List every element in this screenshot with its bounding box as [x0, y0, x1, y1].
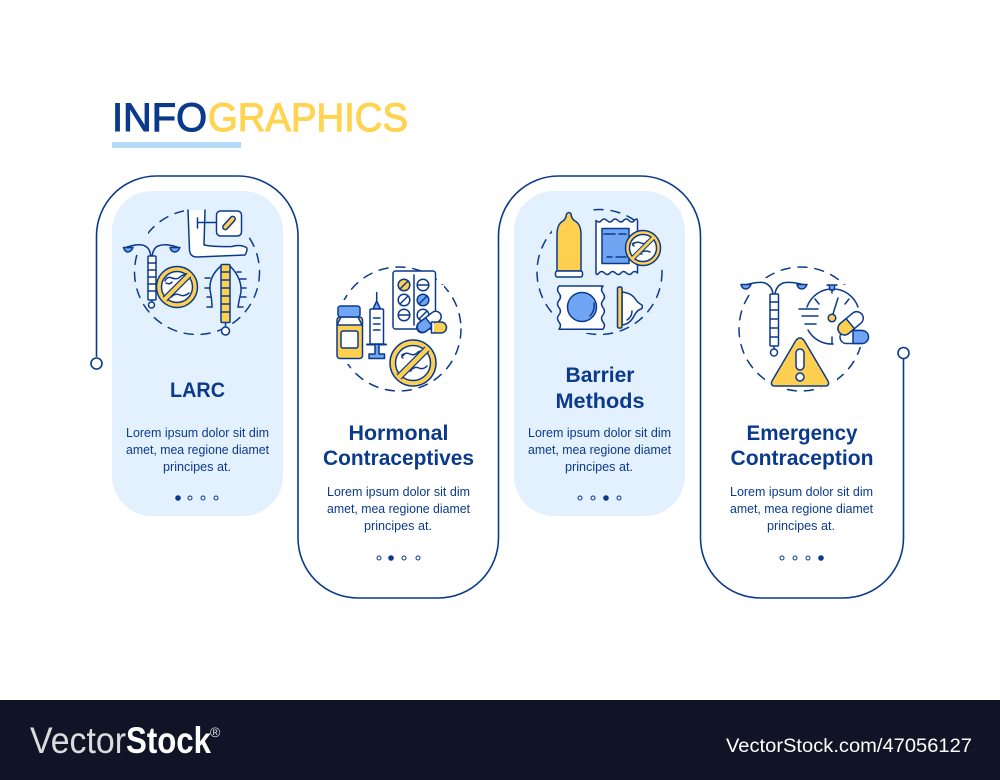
text block: Hormonal: Lorem ipsum dolor sit dim [327, 485, 470, 499]
footer logo: Vector [30, 720, 126, 761]
footer logo [30, 720, 221, 761]
text block: LARC: principes at. [163, 460, 231, 474]
pager dots: LARC [176, 496, 218, 500]
footer id: VectorStock.com/47056127 [726, 735, 972, 757]
text block: Hormonal: principes at. [364, 519, 432, 533]
text block: Barrier: principes at. [565, 460, 633, 474]
text block: Emergency: amet, mea regione diamet [730, 502, 874, 516]
title: GRAPHICS [208, 96, 408, 140]
heading: Emergency Contraception: Emergency [746, 422, 858, 445]
wrapper with no sign [596, 219, 660, 274]
vial [337, 306, 362, 358]
panel: light background Barrier Methods [514, 191, 685, 516]
panel: light background LARC [112, 191, 283, 516]
condom [556, 212, 582, 277]
heading: LARC: LARC [170, 379, 225, 402]
title underline [112, 142, 241, 148]
capsules [835, 309, 868, 344]
title: INFO [112, 96, 207, 140]
heading: Emergency Contraception [730, 422, 874, 470]
stopwatch [799, 285, 858, 344]
text block: Barrier: Lorem ipsum dolor sit dim [528, 426, 671, 440]
icon: Emergency Contraception [736, 267, 870, 391]
pager dots: Hormonal [377, 556, 420, 560]
pager dots: Emergency [780, 556, 823, 560]
round packet [558, 286, 604, 329]
text block: Emergency: principes at. [767, 519, 835, 533]
no sperm sign [390, 340, 436, 386]
text block: Emergency: Lorem ipsum dolor sit dim [730, 485, 873, 499]
side-view condom [618, 287, 642, 328]
IUD [124, 245, 180, 308]
heading: Barrier Methods: Methods [556, 390, 644, 413]
no sperm sign [156, 266, 198, 308]
heading: Hormonal Contraceptives: Contraceptives [323, 447, 474, 470]
pager dots: Barrier [578, 496, 621, 500]
heading: Barrier Methods: Barrier [566, 364, 634, 387]
icon: Barrier Methods [537, 208, 664, 334]
icon: Hormonal Contraceptives [332, 267, 461, 391]
text block: Barrier: amet, mea regione diamet [528, 443, 672, 457]
warning triangle [771, 338, 829, 386]
syringe [367, 292, 386, 358]
text block: Emergency [730, 485, 874, 533]
connecting outline [91, 176, 909, 598]
blister pack [393, 271, 436, 329]
IUD [741, 282, 807, 356]
implant rod [205, 264, 246, 335]
heading: Hormonal Contraceptives: Hormonal [348, 422, 448, 445]
arm with implant [188, 210, 247, 257]
footer logo: Stock [126, 720, 211, 761]
text block: LARC [126, 426, 270, 474]
text block: Barrier [528, 426, 672, 474]
icon: LARC [124, 205, 260, 335]
footer bar [0, 700, 1000, 780]
heading: Emergency Contraception: Contraception [730, 447, 874, 470]
footer logo: ® [210, 724, 221, 740]
text block: Hormonal [327, 485, 471, 533]
text block: Hormonal: amet, mea regione diamet [327, 502, 471, 516]
heading: Hormonal Contraceptives [323, 422, 474, 470]
capsules [415, 309, 446, 335]
text block: LARC: Lorem ipsum dolor sit dim [126, 426, 269, 440]
text block: LARC: amet, mea regione diamet [126, 443, 270, 457]
heading: Barrier Methods [556, 364, 644, 413]
title [112, 96, 408, 140]
